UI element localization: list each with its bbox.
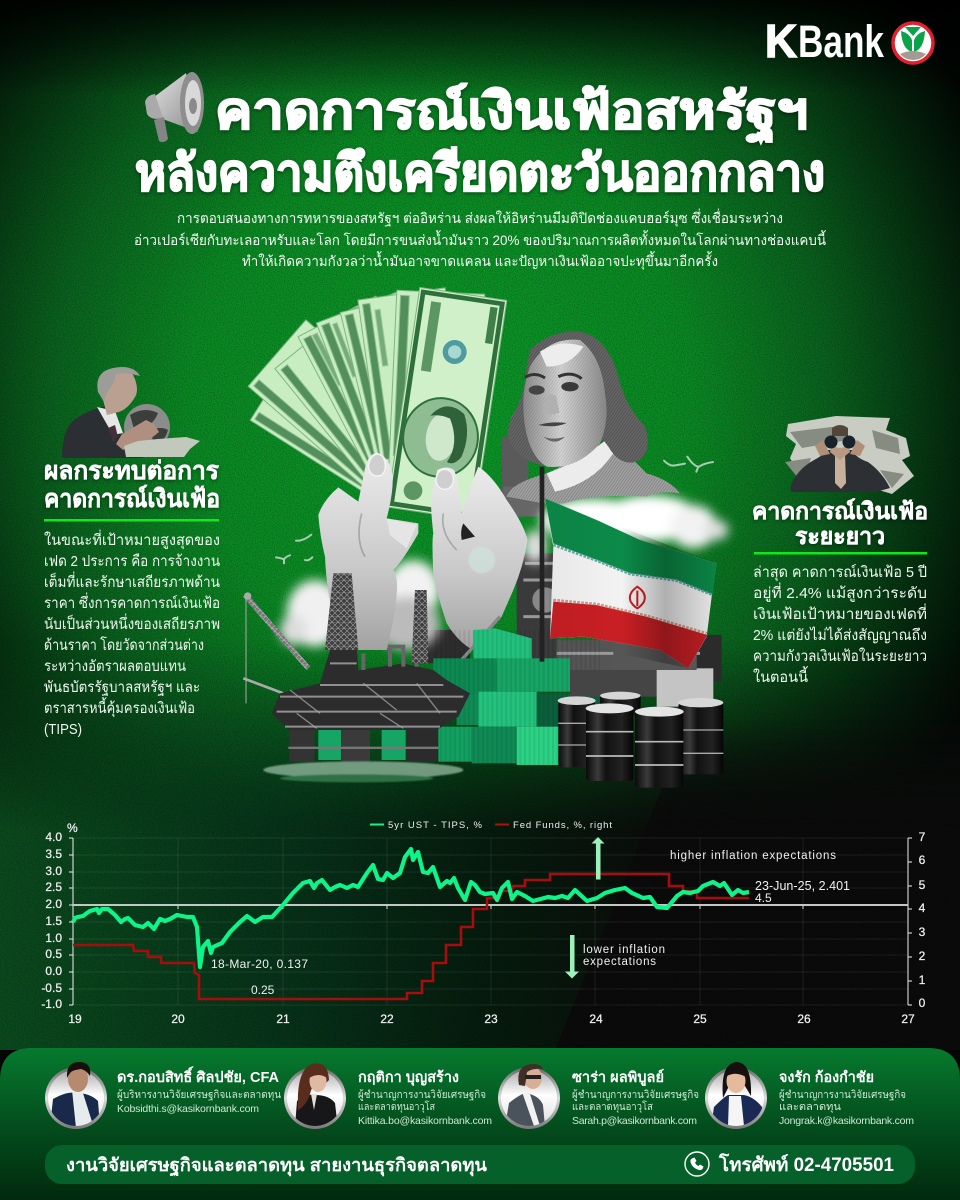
clouds [280,495,728,650]
annotations: 4.5 [755,891,772,905]
body text: (TIPS) [44,721,82,738]
author 3: และตลาดทุนอาวุโส [572,1100,654,1113]
body text: เต็มที่และรักษาเสถียรภาพด้าน [44,571,220,591]
author 1: Kobsidthi.s@kasikornbank.com [117,1103,259,1115]
author 2 [284,1063,492,1129]
arrow: lower [565,935,579,978]
axis labels: 2.5 [45,880,62,894]
body text: ด้านราคา โดยวัดจากส่วนต่าง [44,636,204,654]
axis labels: -1.0 [41,997,62,1011]
axis labels: 4.0 [45,830,62,844]
axis labels: 7 [919,830,926,844]
annotations: expectations [583,956,656,968]
axis labels: 23 [484,1012,498,1026]
body text [753,564,927,686]
logo: KBank [765,15,933,67]
heading [44,457,220,513]
title: หลังความตึงเครียดตะวันออกกลาง [135,145,825,201]
intro text: ทำให้เกิดความกังวลว่าน้ำมันอาจขาดแคลน และปัญหาเงินเฟ้ออาจปะทุขึ้นมาอีกครั้ง [242,251,718,270]
axis labels: -0.5 [41,981,62,995]
photo: Powell with globe [62,367,200,458]
annotations: lower inflation [583,944,665,956]
body text: ล่าสุด คาดการณ์เงินเฟ้อ 5 ปี [753,564,927,582]
axis labels: 3.5 [45,847,62,861]
oil barrels [558,692,723,788]
green line: 5yr UST - TIPS [73,849,749,967]
axis labels: 22 [380,1012,394,1026]
axis labels: 5 [919,878,926,892]
panel: authors footer [0,1048,960,1200]
containers [433,628,600,765]
body text: ในตอนนี้ [753,666,808,686]
axis labels: 1.5 [45,914,62,928]
water reflection [263,761,463,782]
author 4: Jongrak.k@kasikornbank.com [779,1115,914,1127]
heading: ระยะยาว [795,523,885,549]
author 3 [498,1064,699,1129]
logo: KBank: Bank [798,16,885,67]
axis labels: 27 [901,1012,915,1026]
right section [752,416,928,686]
legend [370,820,612,831]
logo: KBank: K [765,15,797,67]
photo: man with binoculars [785,416,914,494]
body text: ราคา ซึ่งการคาดการณ์เงินเฟ้อ [44,592,220,612]
annotations [211,850,850,997]
arrow: higher [592,837,604,880]
axis labels: 2 [919,949,926,963]
chart grid [73,838,908,1005]
contact bar: งานวิจัยเศรษฐกิจและตลาดทุน สายงานธุรกิจตลาดทุน [66,1155,488,1177]
annotations: higher inflation expectations [670,850,836,862]
body text: นับเป็นส่วนหนึ่งของเสถียรภาพ [44,613,220,633]
annotations: 0.25 [251,983,275,997]
axis labels: 2.0 [45,897,62,911]
gray containers [570,643,713,707]
axis labels: 0 [919,996,926,1010]
axis labels: 4 [919,901,926,915]
axis labels: 3.0 [45,864,62,878]
birds [276,457,713,563]
axis labels: % [67,821,78,835]
axis labels: 1 [919,973,926,987]
icon: KBank leaf emblem [893,23,933,63]
body text: เฟด 2 ประการ คือ การจ้างงาน [44,553,220,570]
author 3: ซาร่า ผลพิบูลย์ [572,1068,664,1086]
front bill [387,287,507,520]
hands [318,453,528,650]
author 1: ผู้บริหารงานวิจัยเศรษฐกิจและตลาดทุน [117,1089,281,1101]
author 4 [705,1062,914,1129]
refinery behind [427,437,722,682]
icon: megaphone [145,72,204,142]
axis labels: 6 [919,853,926,867]
body text: ในขณะที่เป้าหมายสูงสุดของ [44,529,220,550]
author 2: ผู้ชำนาญการงานวิจัยเศรษฐกิจ [358,1089,486,1101]
author 3: ผู้ชำนาญการงานวิจัยเศรษฐกิจ [572,1089,699,1101]
axis labels [41,821,926,1026]
axis labels: 19 [68,1012,82,1026]
contact bar [45,1145,915,1184]
central illustration [243,287,728,788]
chart: 5yr UST - TIPS vs Fed Funds [41,820,926,1026]
axis labels: 25 [693,1012,707,1026]
intro text: การตอบสนองทางการทหารของสหรัฐฯ ต่ออิหร่าน ส่งผลให้อิหร่านมีมติปิดช่องแคบฮอร์มุซ ซึ่งเชื่อมระหว่าง [177,209,783,227]
axis labels: 0.5 [45,947,62,961]
axis labels: 0.0 [45,964,62,978]
author 2: กฤติกา บุญสร้าง [358,1069,459,1086]
body text: 2% แต่ยังไม่ได้ส่งสัญญาณถึง [753,626,927,644]
annotations: 18-Mar-20, 0.137 [211,957,308,971]
body text: อยู่ที่ 2.4% แม้สูงกว่าระดับ [753,582,927,602]
body text: เงินเฟ้อเป้าหมายของเฟดที่ [753,603,927,623]
flag of Iran [545,498,717,668]
author 4: ผู้ชำนาญการงานวิจัยเศรษฐกิจ [779,1089,906,1101]
axis labels: 21 [276,1012,290,1026]
annotations: 23-Jun-25, 2.401 [755,879,850,893]
portrait: Franklin [507,332,680,503]
body text: ตราสารหนี้คุ้มครองเงินเฟ้อ [44,697,195,718]
axis labels: 20 [171,1012,185,1026]
legend: Fed Funds, %, right [513,820,612,831]
heading: คาดการณ์เงินเฟ้อ [752,498,928,524]
title [135,83,825,201]
author 3: Sarah.p@kasikornbank.com [572,1115,697,1127]
heading: ผลกระทบต่อการ [44,457,220,485]
heading [752,498,928,549]
body text: ความกังวลเงินเฟ้อในระยะยาว [753,647,927,665]
axis labels: 24 [589,1012,603,1026]
red line: Fed Funds [73,874,749,999]
axis labels: 26 [797,1012,811,1026]
icon: phone [685,1152,709,1176]
author 4: จงรัก ก้องกำชัย [779,1069,874,1086]
legend: 5yr UST - TIPS, % [388,820,483,831]
crane arms [243,592,500,703]
flag pole [540,467,544,662]
author 4: และตลาดทุน [779,1101,841,1113]
author 1: ดร.กอบสิทธิ์ ศิลปชัย, CFA [117,1066,280,1086]
heading: คาดการณ์เงินเฟ้อ [44,484,220,513]
oil rig [272,573,470,762]
body text: ระหว่างอัตราผลตอบแทน [44,658,186,675]
author 1 [45,1062,281,1129]
intro text [134,209,826,270]
body text: พันธบัตรรัฐบาลสหรัฐฯ และ [44,679,200,696]
title: คาดการณ์เงินเฟ้อสหรัฐฯ [215,83,808,143]
axis labels: 1.0 [45,931,62,945]
author 2: Kittika.bo@kasikornbank.com [358,1115,492,1127]
intro text: อ่าวเปอร์เซียกับทะเลอาหรับและโลก โดยมีการขนส่งน้ำมันราว 20% ของปริมาณการผลิตทั้งหมดในโลกผ่านทางช่องแคบนี้ [134,230,826,248]
body text [44,529,220,738]
chart axes [69,838,912,1005]
contact bar: โทรศัพท์ 02-4705501 [718,1153,894,1176]
left section [44,367,220,738]
dollar bill fan [248,287,507,520]
axis labels: 3 [919,925,926,939]
author 2: และตลาดทุนอาวุโส [358,1100,436,1113]
